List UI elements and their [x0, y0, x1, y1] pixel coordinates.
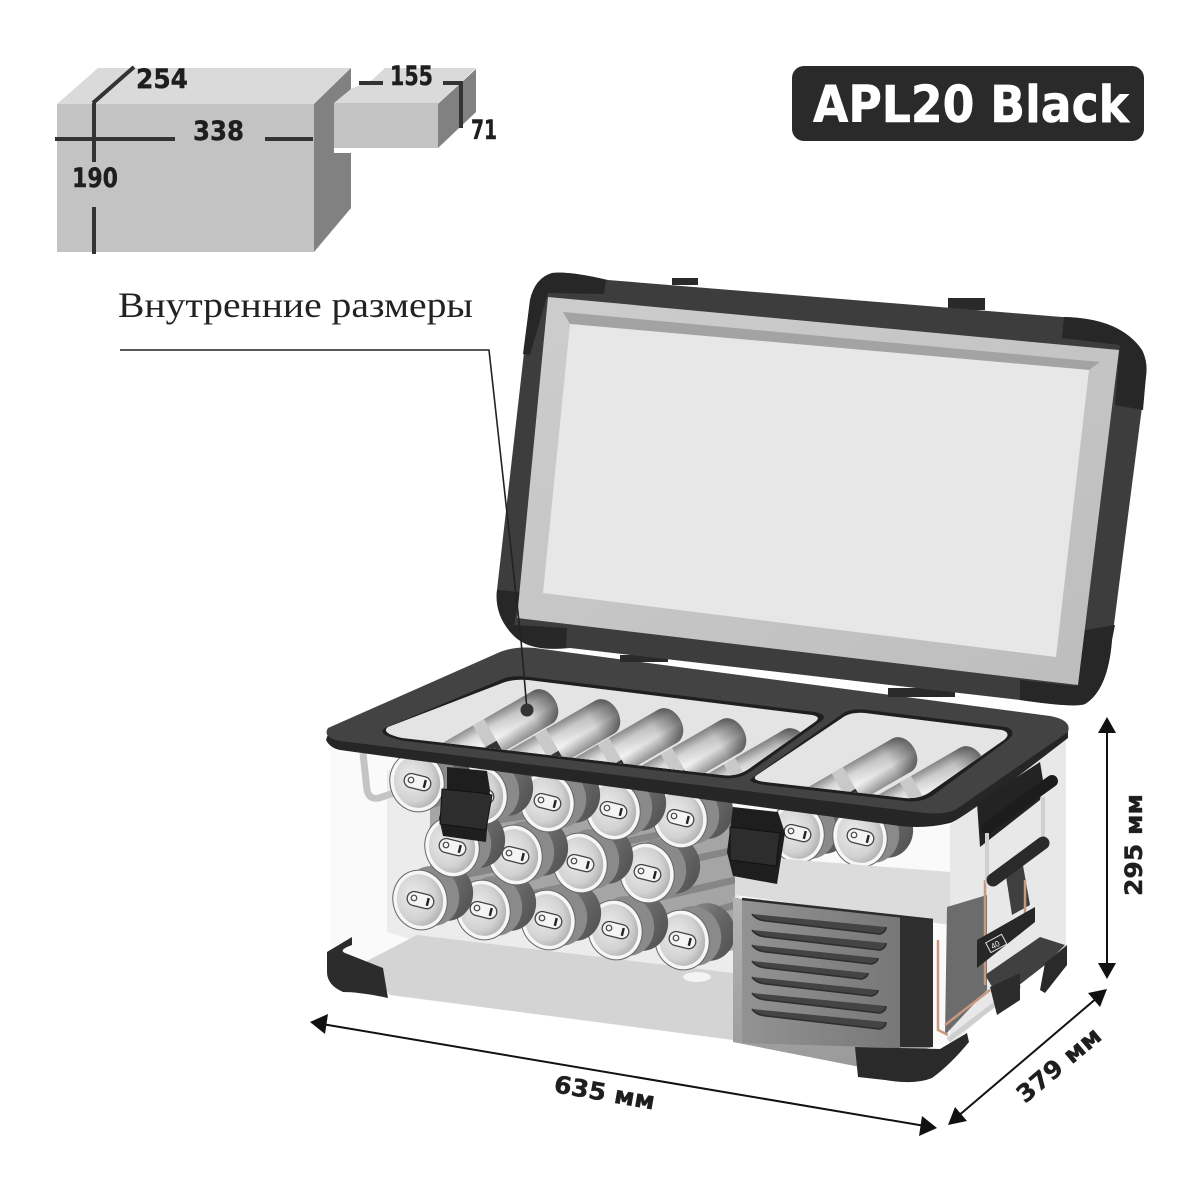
main compartment box — [57, 68, 351, 252]
can cylinders behind lids — [430, 780, 735, 955]
arrow: depth 379 mm — [948, 989, 1107, 1125]
rim top frame — [326, 648, 1069, 827]
lid hinges — [620, 278, 985, 697]
lid inner frame — [517, 297, 1119, 685]
left foot — [327, 937, 388, 998]
diagram: inner compartment dimensions — [55, 61, 497, 254]
small compressor-step box — [334, 68, 476, 153]
lid bevel shadow — [563, 312, 1100, 370]
display strip: 40 — [989, 939, 1002, 951]
cans inside left section — [386, 680, 818, 776]
cooler glass body — [330, 735, 1066, 1045]
arrow: height 295 mm: 295 мм — [1120, 794, 1148, 896]
leader line to interior — [120, 350, 534, 716]
product: open cooler — [326, 273, 1146, 1082]
lid mirror panel — [543, 324, 1089, 657]
dimension lines — [55, 67, 461, 254]
left latch — [439, 767, 492, 842]
dimension 71: 71 — [471, 115, 497, 146]
vent louvers — [752, 914, 886, 1029]
label: inner dimensions: Внутренние размеры — [118, 285, 473, 325]
dimension 254: 254 — [136, 64, 188, 95]
rear right foot and latch — [990, 945, 1067, 1015]
left handle — [363, 753, 394, 798]
arrow: depth 379 mm: 379 мм — [1011, 1022, 1107, 1109]
compressor vent panel — [733, 897, 933, 1067]
cans inside right section — [754, 712, 1008, 798]
display strip — [977, 907, 1035, 968]
dimension 155: 155 — [390, 61, 433, 92]
lid shell — [497, 273, 1146, 705]
dimension 338: 338 — [193, 116, 244, 147]
cans, front view — [384, 739, 919, 976]
arrow: width 635 mm: 635 мм — [552, 1070, 657, 1116]
title badge: APL20 Black: APL20 Black — [813, 76, 1130, 135]
compressor compartment side — [938, 735, 1066, 1045]
lid corners — [497, 273, 1146, 705]
side handle — [977, 762, 1052, 883]
lid — [497, 273, 1146, 705]
dimension 190: 190 — [72, 163, 118, 194]
arrow: width 635 mm — [310, 1014, 937, 1136]
front right foot — [855, 1033, 969, 1082]
compressor compartment upper tint — [735, 855, 950, 925]
right latch — [727, 807, 785, 884]
arrow: height 295 mm — [1098, 717, 1148, 979]
